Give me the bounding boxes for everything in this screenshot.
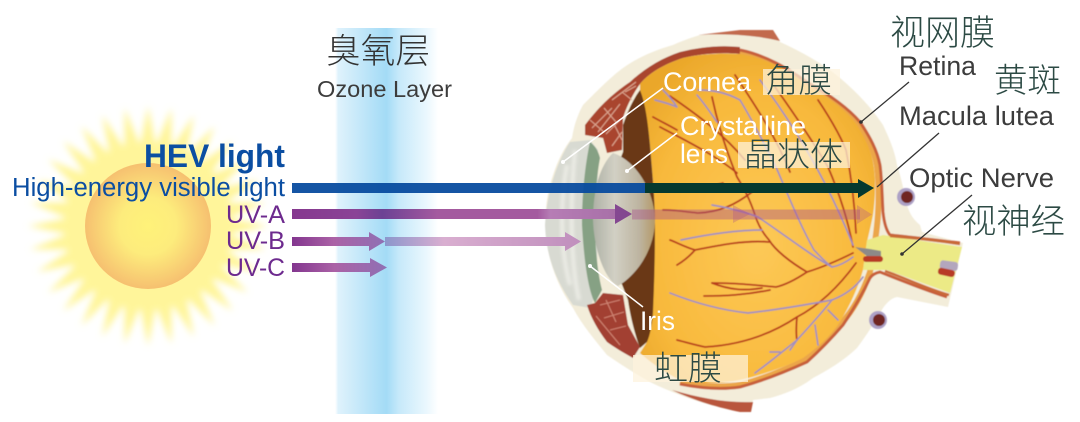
heading: HEV light: HEV light [144,138,285,174]
heading: ozone chinese: 臭氧层 [326,33,430,71]
nerve outer rim bottom [885,271,949,295]
lens body [593,153,655,286]
label: retina: Retina [899,51,976,81]
label: macula chinese: 黄斑 [994,63,1061,100]
label: optic nerve chinese: 视神经 [962,203,1065,241]
vessel dot lower [869,311,887,329]
ozone layer band [335,28,438,414]
label: lens chinese: 晶状体 [744,136,843,173]
red veins [653,75,856,347]
upper muscle cells [590,82,636,146]
vessel dot upper [897,188,915,206]
label: iris chinese: 虹膜 [654,350,722,388]
iris green [582,142,602,303]
top outer muscle [698,30,780,41]
lower muscle cells [596,300,626,345]
upper muscle [585,46,740,153]
leader: cornea [561,88,663,164]
label: ozone layer: Ozone Layer [317,76,452,102]
arrow: UV-A [292,204,872,224]
arrow: HEV light [292,179,874,198]
leader: iris [588,264,643,307]
label: optic nerve: Optic Nerve [909,163,1054,193]
label: retina chinese: 视网膜 [890,14,995,53]
purple veins [655,80,863,373]
lower muscle [587,293,640,358]
nerve outer rim top [890,236,960,244]
sun [28,106,268,346]
cornea [545,140,598,308]
leader: retina [859,82,909,124]
leader: optic nerve [900,195,972,256]
optic nerve [863,235,962,293]
bottom outer muscle [672,390,753,412]
arrow: UV-B outer [292,232,385,251]
arrow: UV-B inner [385,232,581,251]
iris brown band [612,90,655,348]
label: crystalline: Crystalline [680,111,806,141]
leader: macula [877,133,939,187]
sclera [545,30,963,412]
fundus [640,54,875,383]
leader: lens [625,133,677,173]
nerve vessels [855,247,958,278]
label: high-energy visible light: High-energy visible light [12,174,285,202]
cornea highlights [562,150,579,300]
label: macula lutea: Macula lutea [899,101,1054,131]
label: UV-B: UV-B [226,227,285,255]
label backgrounds [633,69,850,382]
label: cornea chinese: 角膜 [765,63,832,100]
arrow: UV-C [292,258,387,277]
label: UV-A: UV-A [226,201,285,229]
label: cornea: Cornea [663,67,751,97]
label: iris: Iris [640,306,675,336]
label: lens: lens [680,139,728,169]
retina outer band [680,52,879,386]
retina rim [680,50,960,388]
label: UV-C: UV-C [226,254,285,282]
eye cross-section [545,30,963,412]
